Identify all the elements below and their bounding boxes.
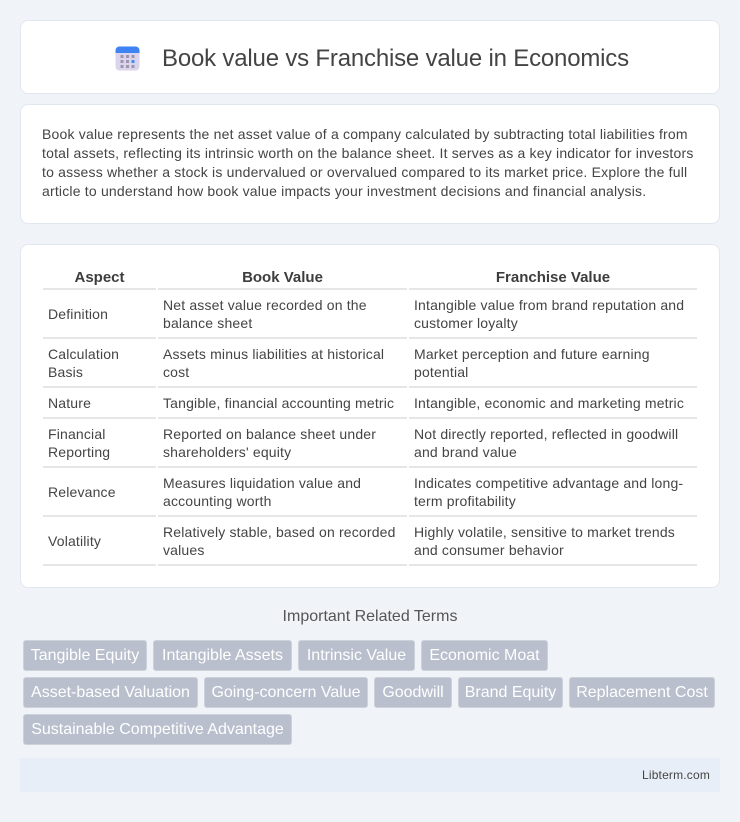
header panel bbox=[20, 20, 720, 94]
row: definition bbox=[48, 297, 684, 331]
row: financial reporting: Financial bbox=[48, 426, 106, 442]
intro text: to assess whether a stock is undervalued or overvalued compared to its market price. Explore the full bbox=[42, 164, 687, 180]
row: financial reporting bbox=[48, 426, 678, 460]
comparison table bbox=[43, 269, 697, 566]
row: relevance: Indicates competitive advantage and long- bbox=[414, 475, 683, 491]
row: nature: Nature bbox=[48, 395, 91, 411]
row: volatility: values bbox=[163, 542, 204, 558]
row: volatility: Relatively stable, based on recorded bbox=[163, 524, 396, 540]
row: financial reporting: Not directly reported, reflected in goodwill bbox=[414, 426, 678, 442]
row: relevance: accounting worth bbox=[163, 493, 272, 509]
row: definition: Definition bbox=[48, 306, 108, 322]
related terms tags: Economic Moat bbox=[429, 647, 540, 664]
related terms tags: Brand Equity bbox=[465, 684, 556, 701]
row: financial reporting: and brand value bbox=[414, 444, 517, 460]
row: relevance: Measures liquidation value and bbox=[163, 475, 361, 491]
row: nature bbox=[48, 395, 684, 411]
related terms heading: Important Related Terms bbox=[283, 608, 457, 625]
row: calculation basis: Calculation bbox=[48, 346, 119, 362]
row: definition: Intangible value from brand reputation and bbox=[414, 297, 684, 313]
table header: Franchise Value bbox=[496, 269, 610, 286]
row: relevance: Relevance bbox=[48, 484, 116, 500]
intro text: total assets, reflecting its intrinsic worth on the balance sheet. It serves as a key indicator for investors bbox=[42, 145, 694, 161]
row: volatility: Volatility bbox=[48, 533, 101, 549]
related terms tags: Intangible Assets bbox=[162, 647, 283, 664]
row: volatility: Highly volatile, sensitive to market trends bbox=[414, 524, 675, 540]
intro text bbox=[42, 126, 694, 199]
related terms tags: Tangible Equity bbox=[31, 647, 139, 664]
row: volatility bbox=[48, 524, 675, 558]
intro text: article to understand how book value impacts your investment decisions and financial analysis. bbox=[42, 183, 646, 199]
table header bbox=[74, 269, 610, 286]
row: calculation basis: cost bbox=[163, 364, 189, 380]
row: calculation basis bbox=[48, 346, 650, 380]
row: volatility: and consumer behavior bbox=[414, 542, 564, 558]
row: financial reporting: shareholders' equity bbox=[163, 444, 291, 460]
row: relevance bbox=[48, 475, 683, 509]
footer bbox=[20, 758, 720, 792]
row: definition: balance sheet bbox=[163, 315, 252, 331]
row: financial reporting: Reported on balance sheet under bbox=[163, 426, 376, 442]
row: calculation basis: Market perception and future earning bbox=[414, 346, 650, 362]
related terms tags: Intrinsic Value bbox=[307, 647, 406, 664]
comparison table panel bbox=[20, 244, 720, 588]
related terms tags: Goodwill bbox=[382, 684, 444, 701]
intro text: Book value represents the net asset value of a company calculated by subtracting total liabilities from bbox=[42, 126, 688, 142]
row: definition: Net asset value recorded on the bbox=[163, 297, 367, 313]
related terms tags: Asset-based Valuation bbox=[31, 684, 190, 701]
related terms tags: Sustainable Competitive Advantage bbox=[31, 721, 284, 738]
related terms tags: Replacement Cost bbox=[576, 684, 708, 701]
related terms tags bbox=[23, 640, 715, 745]
related terms tags: Going-concern Value bbox=[211, 684, 361, 701]
row: calculation basis: Assets minus liabilities at historical bbox=[163, 346, 384, 362]
row: nature: Intangible, economic and marketing metric bbox=[414, 395, 684, 411]
row: definition: customer loyalty bbox=[414, 315, 518, 331]
row: calculation basis: potential bbox=[414, 364, 468, 380]
row: calculation basis: Basis bbox=[48, 364, 83, 380]
row: nature: Tangible, financial accounting metric bbox=[163, 395, 394, 411]
table header: Aspect bbox=[74, 269, 125, 286]
row: financial reporting: Reporting bbox=[48, 444, 110, 460]
intro paragraph panel bbox=[20, 104, 720, 224]
table header: Book Value bbox=[242, 269, 323, 286]
icon: calendar bbox=[116, 46, 140, 70]
title: Book value vs Franchise value in Economics bbox=[162, 45, 629, 72]
footer credit: Libterm.com bbox=[642, 768, 710, 782]
row: relevance: term profitability bbox=[414, 493, 516, 509]
